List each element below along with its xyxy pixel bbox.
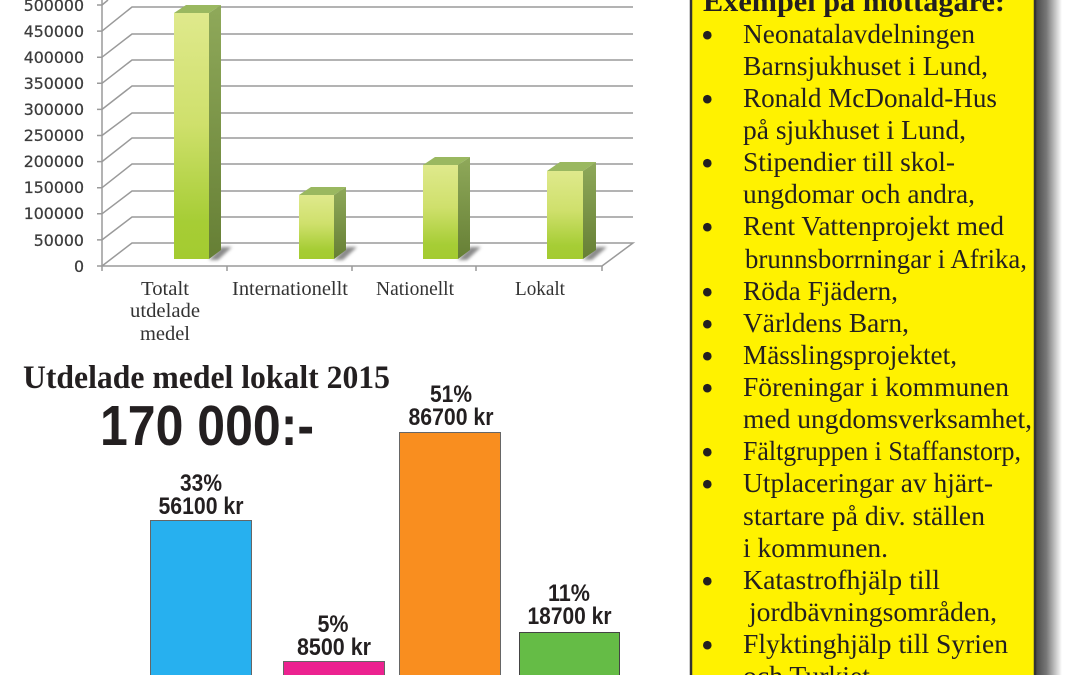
recipients list: Föreningar i kommunen (743, 372, 1009, 402)
recipients list: Rent Vattenprojekt med (743, 211, 1005, 241)
bar: orange 51% (400, 381, 500, 675)
category labels (130, 278, 565, 345)
recipients list: • (701, 368, 714, 408)
category labels: medel (140, 323, 190, 345)
bar: green 11%: 11% (548, 580, 590, 607)
recipients list: • (701, 336, 714, 376)
y axis labels: 400000 (24, 48, 84, 67)
recipients list: Mässlingsprojektet, (743, 340, 957, 370)
bar: Totalt utdelade medel (163, 5, 232, 260)
y axis labels: 0 (74, 257, 84, 276)
y axis labels: 450000 (24, 22, 84, 41)
recipients list: Neonatalavdelningen (743, 19, 975, 49)
recipients list: • (701, 207, 714, 247)
recipients list: ungdomar och andra, (743, 179, 975, 209)
recipients list: på sjukhuset i Lund, (743, 115, 966, 145)
category labels: Nationellt (376, 278, 454, 300)
bar: pink 5%: 5% (318, 611, 348, 638)
recipients list: • (701, 625, 714, 665)
y axis labels: 150000 (24, 178, 84, 197)
category labels: Internationellt (232, 278, 348, 300)
panel: examples of recipients (691, 0, 1062, 675)
recipients list (701, 15, 1032, 675)
recipients list: Fältgruppen i Staffanstorp, (743, 436, 1021, 466)
y axis labels: 100000 (24, 204, 84, 223)
y axis labels (24, 0, 84, 276)
bar: Internationellt (290, 187, 357, 260)
bar: pink 5% (284, 611, 384, 675)
bar: orange 51%: 51% (430, 381, 472, 408)
total amount: 170 000:- (100, 394, 314, 458)
recipients list: Stipendier till skol- (743, 147, 955, 177)
recipients list: • (701, 464, 714, 504)
y axis labels: 300000 (24, 100, 84, 119)
recipients list: Röda Fjädern, (743, 276, 898, 306)
bar: Nationellt (414, 157, 481, 260)
recipients list: Barnsjukhuset i Lund, (743, 51, 988, 81)
recipients list: brunnsborrningar i Afrika, (745, 244, 1027, 274)
chart grid (97, 0, 633, 271)
recipients list: • (701, 432, 714, 472)
bar: blue 33%: 56100 kr (158, 493, 244, 520)
panel box (691, 0, 1035, 675)
y axis labels: 50000 (34, 231, 84, 250)
recipients list: startare på div. ställen (743, 501, 986, 531)
bar: blue 33% (150, 470, 252, 675)
bar: green 11% (520, 580, 620, 675)
recipients list: med ungdomsverksamhet, (743, 404, 1032, 434)
recipients list: • (701, 143, 714, 183)
recipients list: Världens Barn, (743, 308, 909, 338)
recipients list: Utplaceringar av hjärt- (743, 468, 993, 498)
y axis labels: 350000 (24, 74, 84, 93)
category labels: utdelade (130, 300, 200, 322)
y axis labels: 250000 (24, 126, 84, 145)
panel: 3D bar chart of distributed funds (24, 0, 633, 345)
recipients list: • (701, 561, 714, 601)
recipients list: • (701, 304, 714, 344)
bar: blue 33%: 33% (180, 470, 222, 497)
bar: orange 51%: 86700 kr (408, 404, 494, 431)
heading: Utdelade medel lokalt 2015: Utdelade medel lokalt 2015 (23, 360, 390, 396)
bar: pink 5%: 8500 kr (297, 634, 371, 661)
recipients list: • (701, 15, 714, 55)
panel: local distribution bar chart (150, 381, 620, 675)
recipients list: • (701, 272, 714, 312)
category labels: Totalt (141, 278, 189, 300)
recipients list: i kommunen. (743, 533, 888, 563)
category labels: Lokalt (515, 278, 565, 300)
recipients list: Flyktinghjälp till Syrien (743, 629, 1009, 659)
bar: Lokalt (538, 162, 607, 260)
recipients list: jordbävningsområden, (748, 597, 997, 627)
recipients list: • (701, 79, 714, 119)
recipients list: Katastrofhjälp till (743, 565, 940, 595)
recipients list: Ronald McDonald-Hus (743, 83, 997, 113)
panel shadow (1036, 0, 1062, 675)
bar: green 11%: 18700 kr (528, 603, 612, 630)
y axis labels: 200000 (24, 152, 84, 171)
